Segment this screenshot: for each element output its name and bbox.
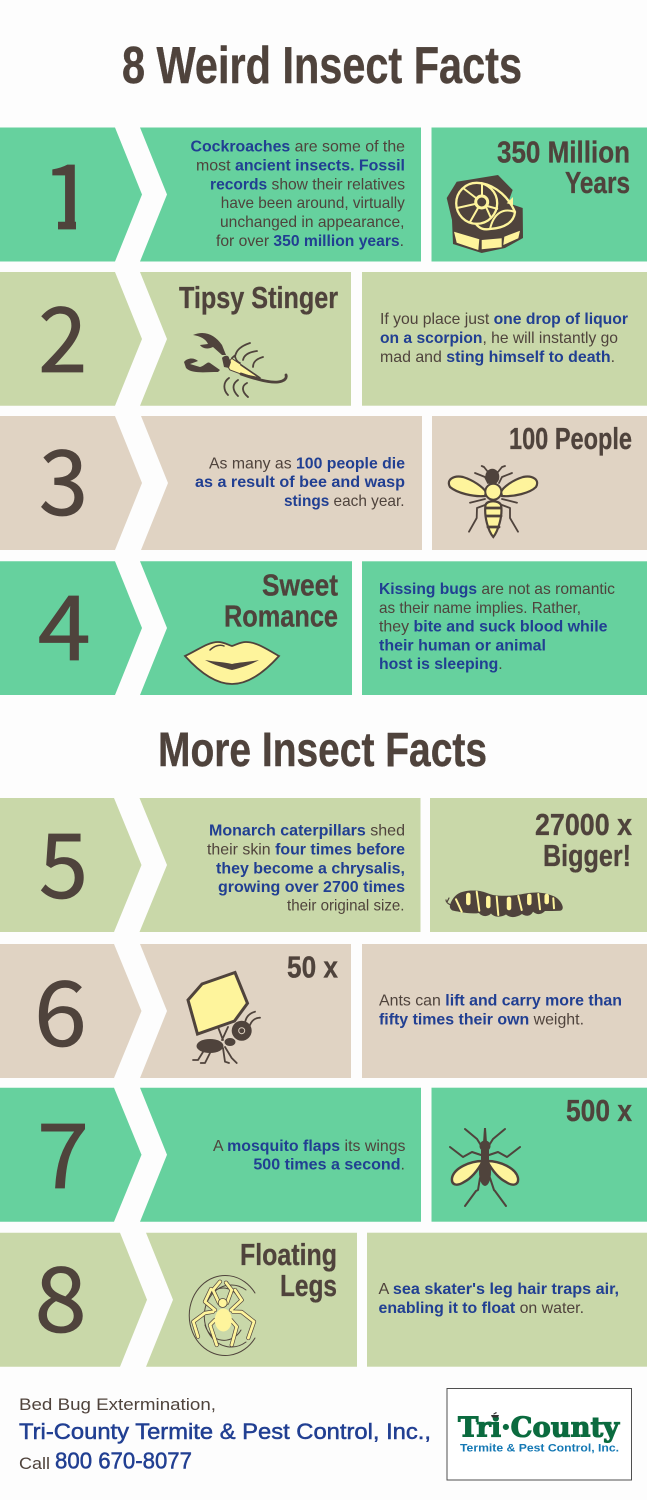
heading panel: 50 x — [140, 944, 351, 1078]
text panel 6 — [362, 944, 647, 1078]
text panel 7: 500 times a second. — [253, 1157, 405, 1174]
text panel 1: for over 350 million years. — [216, 233, 404, 250]
icon: water spider — [189, 1276, 255, 1356]
text panel 2 — [362, 272, 647, 406]
heading: more insect facts: More Insect Facts — [158, 724, 487, 777]
text panel 4 — [362, 561, 647, 695]
text panel 5: their original size. — [287, 898, 404, 915]
panel: fact 8 sea skater — [0, 1228, 647, 1367]
text panel 3: stings each year. — [284, 493, 404, 510]
text panel 1: most ancient insects. Fossil — [196, 158, 405, 175]
heading panel: 50 x: 50 x — [287, 950, 339, 985]
footer contact text: 800 670-8077 — [55, 1448, 192, 1474]
text panel 8: enabling it to float on water. — [378, 1300, 584, 1317]
stat panel: 27000 x bigger — [430, 798, 647, 932]
logo: Tri-County: Termite & Pest Control, Inc. — [460, 1443, 619, 1455]
text panel 4: their human or animal — [379, 638, 546, 655]
text panel 4: they bite and suck blood while — [379, 619, 608, 636]
stat panel: 350 million years: Years — [565, 165, 630, 200]
text panel 5: they become a chrysalis, — [216, 860, 405, 877]
text panel 3 — [141, 416, 422, 550]
number arrow 7 — [0, 1084, 142, 1222]
text panel 5: Monarch caterpillars shed — [209, 823, 405, 840]
logo: Tri-County — [447, 1388, 632, 1480]
text panel 6: Ants can lift and carry more than — [379, 992, 622, 1009]
number arrow 4: 4 — [38, 556, 91, 686]
heading panel: tipsy stinger — [140, 272, 351, 406]
text panel 1: unchanged in appearance, — [220, 214, 404, 231]
number arrow 5: 5 — [39, 794, 88, 924]
text panel 4: Kissing bugs are not as romantic — [379, 581, 615, 598]
heading panel: floating legs — [146, 1233, 357, 1367]
text panel 5 — [140, 798, 420, 932]
heading panel: floating legs: Floating — [240, 1237, 337, 1272]
text panel 6: fifty times their own weight. — [379, 1011, 584, 1028]
text panel 7: A mosquito flaps its wings — [213, 1138, 406, 1155]
text panel 3: as a result of bee and wasp — [195, 474, 405, 491]
text panel 1: have been around, virtually — [221, 195, 405, 212]
text panel 1 — [140, 128, 421, 262]
title: 8 Weird Insect Facts — [122, 37, 522, 95]
heading panel: sweet romance: Romance — [224, 599, 338, 634]
number arrow 1 — [0, 125, 142, 262]
logo: Tri-County: Tri·County — [458, 1413, 620, 1444]
number arrow 7: 7 — [37, 1084, 89, 1214]
number arrow 1: 1 — [41, 125, 95, 255]
panel: fact 6 ants — [0, 942, 647, 1078]
stat panel: 100 people — [432, 416, 647, 550]
number arrow 4 — [0, 556, 142, 695]
footer contact text — [19, 1395, 431, 1474]
footer contact text: Tri-County Termite & Pest Control, Inc., — [19, 1419, 431, 1444]
footer contact text: Bed Bug Extermination, — [19, 1395, 216, 1414]
text panel 2: on a scorpion, he will instantly go — [380, 330, 618, 347]
text panel 8 — [367, 1233, 647, 1367]
number arrow 3 — [0, 411, 142, 550]
heading panel: floating legs: Legs — [280, 1268, 337, 1303]
text panel 3: As many as 100 people die — [209, 456, 405, 473]
stat panel: 500 x — [432, 1088, 647, 1222]
icon: caterpillar — [446, 891, 563, 917]
number arrow 3: 3 — [39, 411, 88, 541]
icon: lips — [185, 642, 279, 684]
footer contact text: Call — [19, 1454, 50, 1473]
icon: scorpion — [184, 333, 286, 397]
panel: fact 7 mosquito — [0, 1084, 647, 1222]
number arrow 6: 6 — [34, 942, 87, 1072]
panel: fact 1 cockroaches — [0, 125, 647, 262]
text panel 2: If you place just one drop of liquor — [380, 311, 628, 328]
number arrow 8: 8 — [35, 1228, 87, 1358]
text panel 8: A sea skater's leg hair traps air, — [378, 1281, 619, 1298]
text panel 5: growing over 2700 times — [218, 879, 405, 896]
text panel 4: as their name implies. Rather, — [379, 600, 581, 617]
text panel 1: records show their relatives — [210, 176, 405, 193]
number arrow 5 — [0, 794, 142, 932]
stat panel: 27000 x bigger: 27000 x — [535, 807, 633, 842]
text panel 5: their skin four times before — [207, 841, 405, 858]
number arrow 2 — [0, 268, 142, 406]
icon: bee — [449, 466, 537, 537]
stat panel: 350 million years — [432, 128, 647, 262]
heading panel: sweet romance: Sweet — [262, 568, 338, 603]
panel: fact 2 scorpion — [0, 268, 647, 406]
number arrow 2: 2 — [38, 268, 87, 398]
text panel 1: Cockroaches are some of the — [190, 139, 405, 156]
text panel 4: host is sleeping. — [379, 656, 503, 673]
number arrow 8 — [0, 1228, 147, 1367]
stat panel: 500 x: 500 x — [566, 1093, 633, 1128]
icon: ammonite fossil — [447, 175, 523, 253]
panel: fact 5 caterpillars — [0, 794, 647, 932]
heading panel: sweet romance — [140, 561, 352, 695]
icon: mosquito — [450, 1128, 520, 1206]
panel: fact 3 bees — [0, 411, 647, 550]
text panel 7 — [140, 1088, 421, 1222]
icon: ant carrying block — [188, 972, 260, 1063]
number arrow 6 — [0, 942, 142, 1078]
heading panel: tipsy stinger: Tipsy Stinger — [179, 280, 338, 315]
panel: fact 4 kissing bugs — [0, 556, 647, 695]
text panel 2: mad and sting himself to death. — [380, 349, 615, 366]
